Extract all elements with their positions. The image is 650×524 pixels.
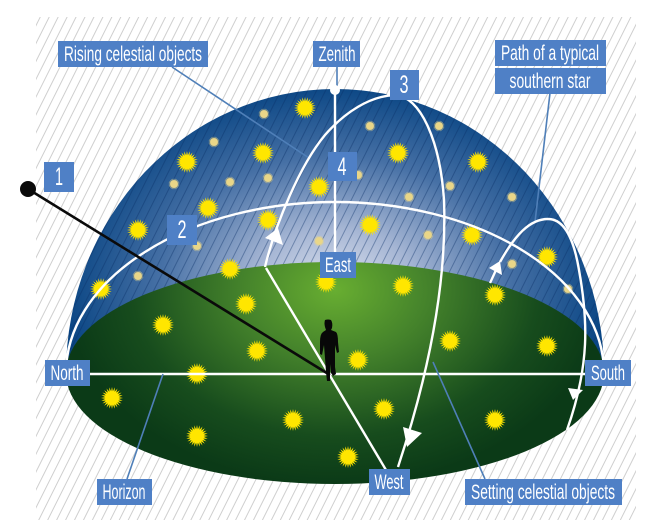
badge 1: 1	[55, 163, 63, 191]
leader: zenith	[336, 67, 338, 90]
pointer line and dot	[20, 181, 330, 375]
horizon line	[88, 373, 590, 375]
badge 1	[44, 162, 74, 192]
zenith point	[330, 85, 340, 95]
leader: path of southern star	[535, 93, 550, 222]
leader: horizon	[127, 374, 163, 479]
badge 3: 3	[400, 71, 408, 99]
label: path of a typical southern star: Path of a typical	[501, 42, 599, 65]
label: path of a typical southern star: southern star	[510, 70, 590, 93]
label: rising celestial objects: Rising celestial objects	[64, 43, 202, 66]
label: east	[320, 252, 356, 278]
label: horizon: Horizon	[102, 481, 146, 504]
person silhouette	[320, 320, 339, 381]
label: west: West	[374, 471, 404, 494]
path of star through the zenith	[265, 95, 444, 467]
leader: rising celestial objects	[172, 67, 309, 158]
leader: setting celestial objects	[433, 362, 485, 479]
celestial paths in the sky	[66, 90, 604, 373]
badge 2	[167, 215, 197, 245]
badge 2: 2	[178, 216, 186, 244]
horizon ground ellipse	[66, 262, 604, 484]
label: path of a typical southern star	[495, 40, 606, 94]
label: zenith	[313, 41, 360, 67]
path of a typical southern star	[490, 219, 585, 430]
label: rising celestial objects	[58, 41, 208, 67]
label: east: East	[325, 254, 351, 277]
stars on the ground	[101, 258, 558, 468]
label: south	[585, 360, 631, 386]
badge 4	[328, 152, 357, 181]
east-west line	[266, 268, 386, 470]
small and large stars in the sky	[90, 97, 574, 300]
label: south: South	[591, 362, 625, 385]
label: north: North	[50, 362, 84, 385]
sky dome	[66, 89, 604, 360]
label: horizon	[97, 479, 152, 505]
arrowheads	[265, 228, 583, 447]
label: north	[45, 360, 90, 386]
label: zenith: Zenith	[318, 43, 356, 66]
badge 3	[390, 70, 419, 100]
badge 4: 4	[338, 153, 347, 181]
label: west	[369, 469, 410, 495]
